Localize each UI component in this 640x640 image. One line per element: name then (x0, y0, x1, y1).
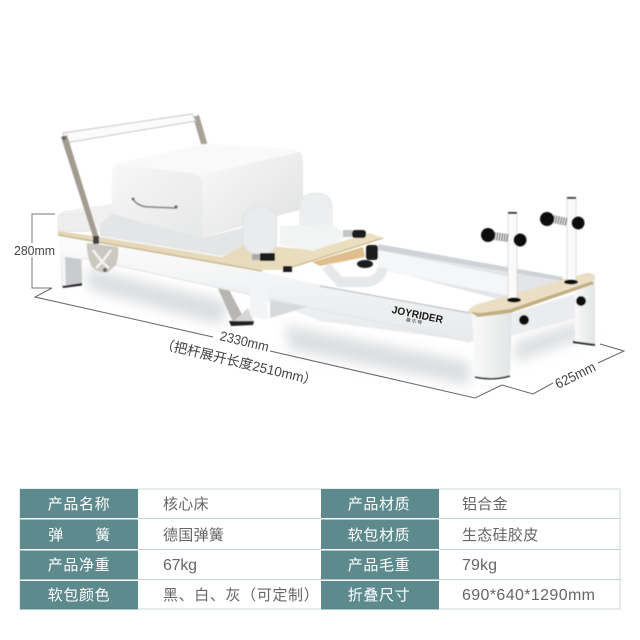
dimension: width 625mm (502, 344, 624, 394)
left labels: 产品净重 (48, 557, 110, 574)
left pull arm (61, 135, 118, 272)
wooden carriage board (58, 231, 383, 270)
box handle (133, 199, 175, 208)
front cross beam (510, 294, 576, 336)
beam lower edge line (82, 258, 470, 342)
left values: 德国弹簧 (163, 526, 224, 544)
front leg (472, 306, 512, 379)
label column right (321, 489, 439, 610)
brand logo: JOYRIDER (391, 304, 444, 326)
carriage rear pad (58, 204, 112, 232)
dimension: height 280mm (14, 214, 55, 288)
front beam (58, 233, 482, 342)
right values: 79kg (462, 557, 497, 574)
push-through handle bar (63, 114, 208, 147)
wooden bracket (312, 247, 365, 266)
wooden end cap (468, 273, 595, 317)
right labels: 产品毛重 (348, 557, 410, 574)
right values (462, 496, 595, 604)
left labels: 产品名称 (48, 496, 110, 513)
left labels (48, 496, 111, 604)
left labels: 簧 (95, 527, 111, 544)
left values: 黑、白、灰（可定制） (163, 587, 319, 604)
right values: 690*640*1290mm (462, 587, 595, 604)
specification table (20, 489, 620, 610)
dimension: length 2330mm: （把杆展开长度2510mm） (159, 336, 318, 388)
left values: 核心床 (163, 496, 209, 513)
right rear leg (573, 277, 595, 346)
dimension: length 2330mm (35, 288, 502, 398)
right labels: 折叠尺寸 (348, 587, 410, 604)
left values (163, 496, 319, 604)
right labels: 软包材质 (348, 527, 410, 544)
right values: 铝合金 (462, 496, 508, 513)
dimension: length 2330mm: 2330mm (218, 328, 270, 355)
brand logo: 趣乐得 (405, 316, 423, 326)
right labels: 产品材质 (348, 496, 410, 513)
right values: 生态硅胶皮 (462, 527, 539, 544)
label column left (20, 489, 138, 610)
dimension: height 280mm: 280mm (14, 243, 55, 258)
right labels (348, 496, 410, 604)
lower crossbar (270, 300, 307, 318)
near upright with knobs (481, 212, 526, 302)
far rails (378, 244, 565, 302)
pivot plate (87, 243, 118, 272)
front side knobs (519, 296, 586, 325)
floor shadow (85, 268, 590, 385)
left values: 67kg (163, 557, 197, 574)
dimension: width 625mm: 625mm (552, 358, 598, 392)
black spring connector (283, 245, 378, 272)
rear leg (60, 236, 82, 288)
left labels: 弹 (48, 527, 64, 544)
curved white bar (326, 266, 382, 282)
beam top edge line (320, 286, 470, 313)
foam box (100, 144, 303, 256)
left labels: 软包颜色 (48, 587, 110, 604)
shoulder blocks (243, 193, 366, 261)
mid angled leg (216, 284, 254, 326)
far upright with knobs (540, 197, 584, 284)
pilates reformer machine (58, 114, 595, 379)
beam post (250, 272, 268, 320)
carriage base under box (100, 214, 262, 256)
